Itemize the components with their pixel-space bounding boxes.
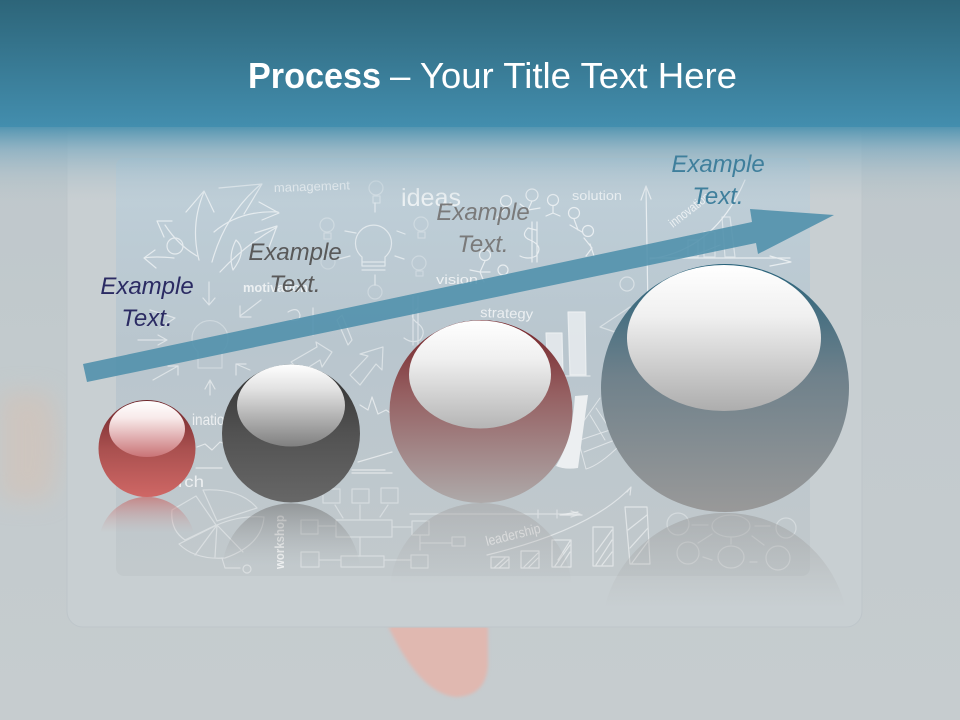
doodle: circle network: [667, 513, 796, 570]
label 1: Example: [100, 273, 194, 300]
doodle: line graph mid left: [196, 397, 582, 515]
label 4: Example: [671, 151, 765, 178]
sphere 4: teal grey: [601, 264, 849, 512]
label 3: [436, 199, 530, 258]
title: [248, 55, 737, 96]
doodle: arrow burst: [144, 184, 279, 272]
label 2: Example: [248, 239, 342, 266]
doodle: words: solution: [572, 188, 622, 203]
tablet screen: [116, 158, 810, 576]
doodle: leadership bar chart: [410, 487, 650, 568]
doodle: growth chart top right: [641, 180, 791, 310]
blurred hand behind tablet: [0, 392, 488, 697]
label 1: Text.: [121, 305, 173, 332]
doodle: lower-right small icons: [600, 277, 640, 332]
label 3: Example: [436, 199, 530, 226]
doodle: words: management: [274, 178, 351, 195]
header band: [0, 0, 960, 127]
tablet frame: [67, 110, 862, 627]
doodle: flow chart boxes: [301, 488, 465, 568]
sphere 3: faded red: [390, 320, 572, 503]
doodle: words: leadership: [484, 520, 542, 549]
sphere 1: red: [98, 400, 196, 497]
doodle: words: [178, 178, 713, 570]
doodle: words: vision: [436, 272, 478, 287]
sketch doodles on screen: [138, 178, 796, 573]
doodle: people circle and dollar: [404, 189, 594, 345]
rising arrow: [83, 209, 834, 382]
sphere 2: dark grey: [222, 364, 360, 502]
doodle: words: strategy: [480, 304, 533, 322]
doodle: light bulbs: [320, 181, 428, 299]
doodle: words: rch: [178, 474, 204, 491]
title: – Your Title Text Here: [390, 55, 737, 96]
title: Process: [248, 55, 381, 96]
label 2: [248, 239, 342, 298]
doodle: block arrows: [291, 315, 383, 385]
doodle: words: motivation: [243, 280, 308, 295]
reflection: sphere 1: [100, 497, 194, 533]
doodle: bar and pie charts: [480, 312, 620, 469]
doodle: words: workshop: [273, 515, 287, 570]
label 2: Text.: [269, 271, 321, 298]
reflection: sphere 3: [390, 503, 572, 585]
doodle: question bulb and small arrows: [138, 282, 313, 395]
doodle: words: ination: [192, 412, 232, 429]
doodle: pie chart bottom left: [172, 490, 264, 573]
doodle: words: ideas: [401, 184, 461, 212]
label 3: Text.: [457, 231, 509, 258]
label 4: [671, 151, 765, 210]
header band fade: [0, 127, 960, 202]
label 4: Text.: [692, 183, 744, 210]
doodle: words: innovation: [666, 189, 713, 230]
reflection: sphere 2: [222, 503, 360, 565]
label 1: [100, 273, 194, 332]
reflection: sphere 4: [604, 513, 846, 608]
